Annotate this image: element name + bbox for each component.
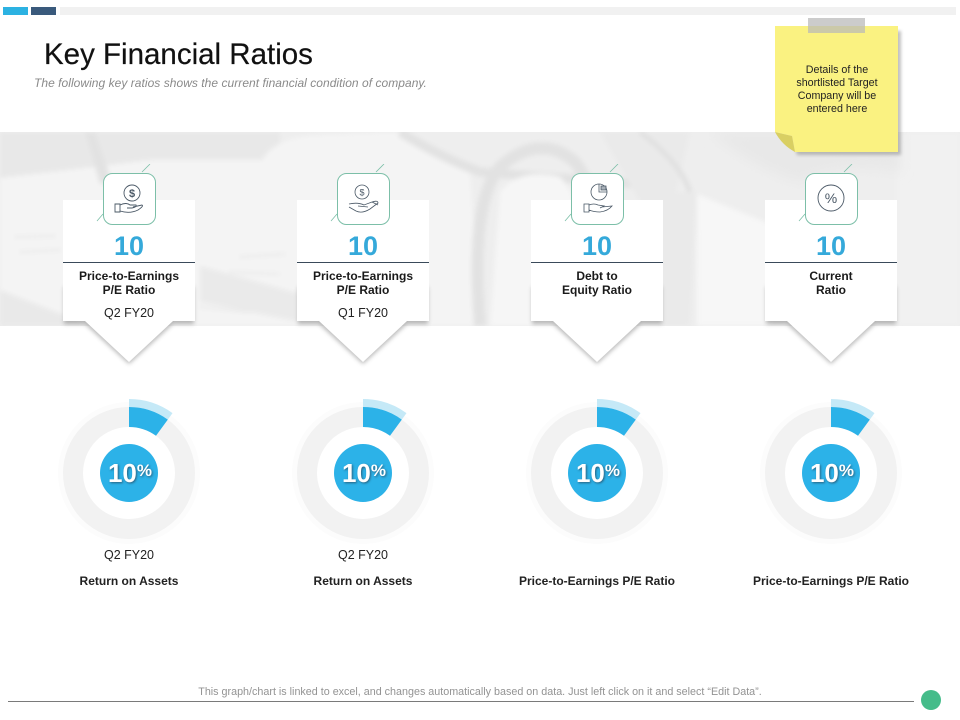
label: Price-to-Earnings bbox=[313, 268, 413, 282]
value: 10 bbox=[114, 231, 144, 261]
caption: donut 3 metric: Price-to-Earnings P/E Ratio bbox=[519, 574, 675, 588]
caption: donut 1 period: Q2 FY20 bbox=[104, 548, 154, 562]
donut value: 10% bbox=[576, 458, 620, 488]
period: Q1 FY20 bbox=[338, 306, 388, 320]
label: P/E Ratio bbox=[337, 282, 389, 296]
caption: donut 4 metric: Price-to-Earnings P/E Ratio bbox=[753, 574, 909, 588]
sticky note text: Details of the bbox=[806, 64, 868, 76]
sticky note text bbox=[796, 64, 878, 115]
label: Current bbox=[809, 268, 853, 282]
value: 10 bbox=[348, 231, 378, 261]
label bbox=[313, 268, 413, 296]
top accent bar bbox=[3, 7, 956, 15]
footer note: This graph/chart is linked to excel, and changes automatically based on data. Just left click on it and select “Edit Data”. bbox=[198, 686, 762, 698]
value: 10 bbox=[582, 231, 612, 261]
caption: donut 2 period: Q2 FY20 bbox=[338, 548, 388, 562]
panel: card 2: $ bbox=[359, 188, 365, 198]
sticky note text: Company will be bbox=[798, 90, 876, 102]
label: Price-to-Earnings bbox=[79, 268, 179, 282]
donut value: 10% bbox=[810, 458, 854, 488]
sticky note bbox=[775, 18, 903, 156]
label bbox=[562, 268, 632, 296]
donut chart 2 bbox=[297, 399, 429, 539]
background photo band: book and glasses bbox=[0, 132, 960, 326]
label bbox=[809, 268, 853, 296]
label: Ratio bbox=[816, 282, 846, 296]
donut value: 10% bbox=[342, 458, 386, 488]
label: Debt to bbox=[576, 268, 618, 282]
sticky note text: entered here bbox=[807, 103, 867, 115]
panel: card 1 bbox=[62, 164, 196, 365]
panel: card 2 bbox=[296, 164, 430, 365]
footer green dot bbox=[921, 690, 941, 710]
donut value: 10% bbox=[108, 458, 152, 488]
label: Equity Ratio bbox=[562, 282, 632, 296]
label: P/E Ratio bbox=[103, 282, 155, 296]
value: 10 bbox=[816, 231, 846, 261]
panel: card 1: $ bbox=[129, 188, 135, 200]
title: Key Financial Ratios bbox=[44, 38, 313, 70]
caption: donut 2 metric: Return on Assets bbox=[314, 574, 412, 588]
subtitle: The following key ratios shows the current financial condition of company. bbox=[34, 76, 427, 90]
panel: card 4: % bbox=[825, 190, 837, 206]
donut chart 1 bbox=[63, 399, 195, 539]
donut chart 4 bbox=[765, 399, 897, 539]
label bbox=[79, 268, 179, 296]
sticky note text: shortlisted Target bbox=[796, 77, 878, 89]
caption: donut 1 metric: Return on Assets bbox=[80, 574, 178, 588]
footer rule bbox=[8, 701, 914, 702]
panel: card 4 bbox=[764, 164, 898, 365]
donut chart 3 bbox=[531, 399, 663, 539]
panel: card 3 bbox=[530, 164, 664, 365]
period: Q2 FY20 bbox=[104, 306, 154, 320]
